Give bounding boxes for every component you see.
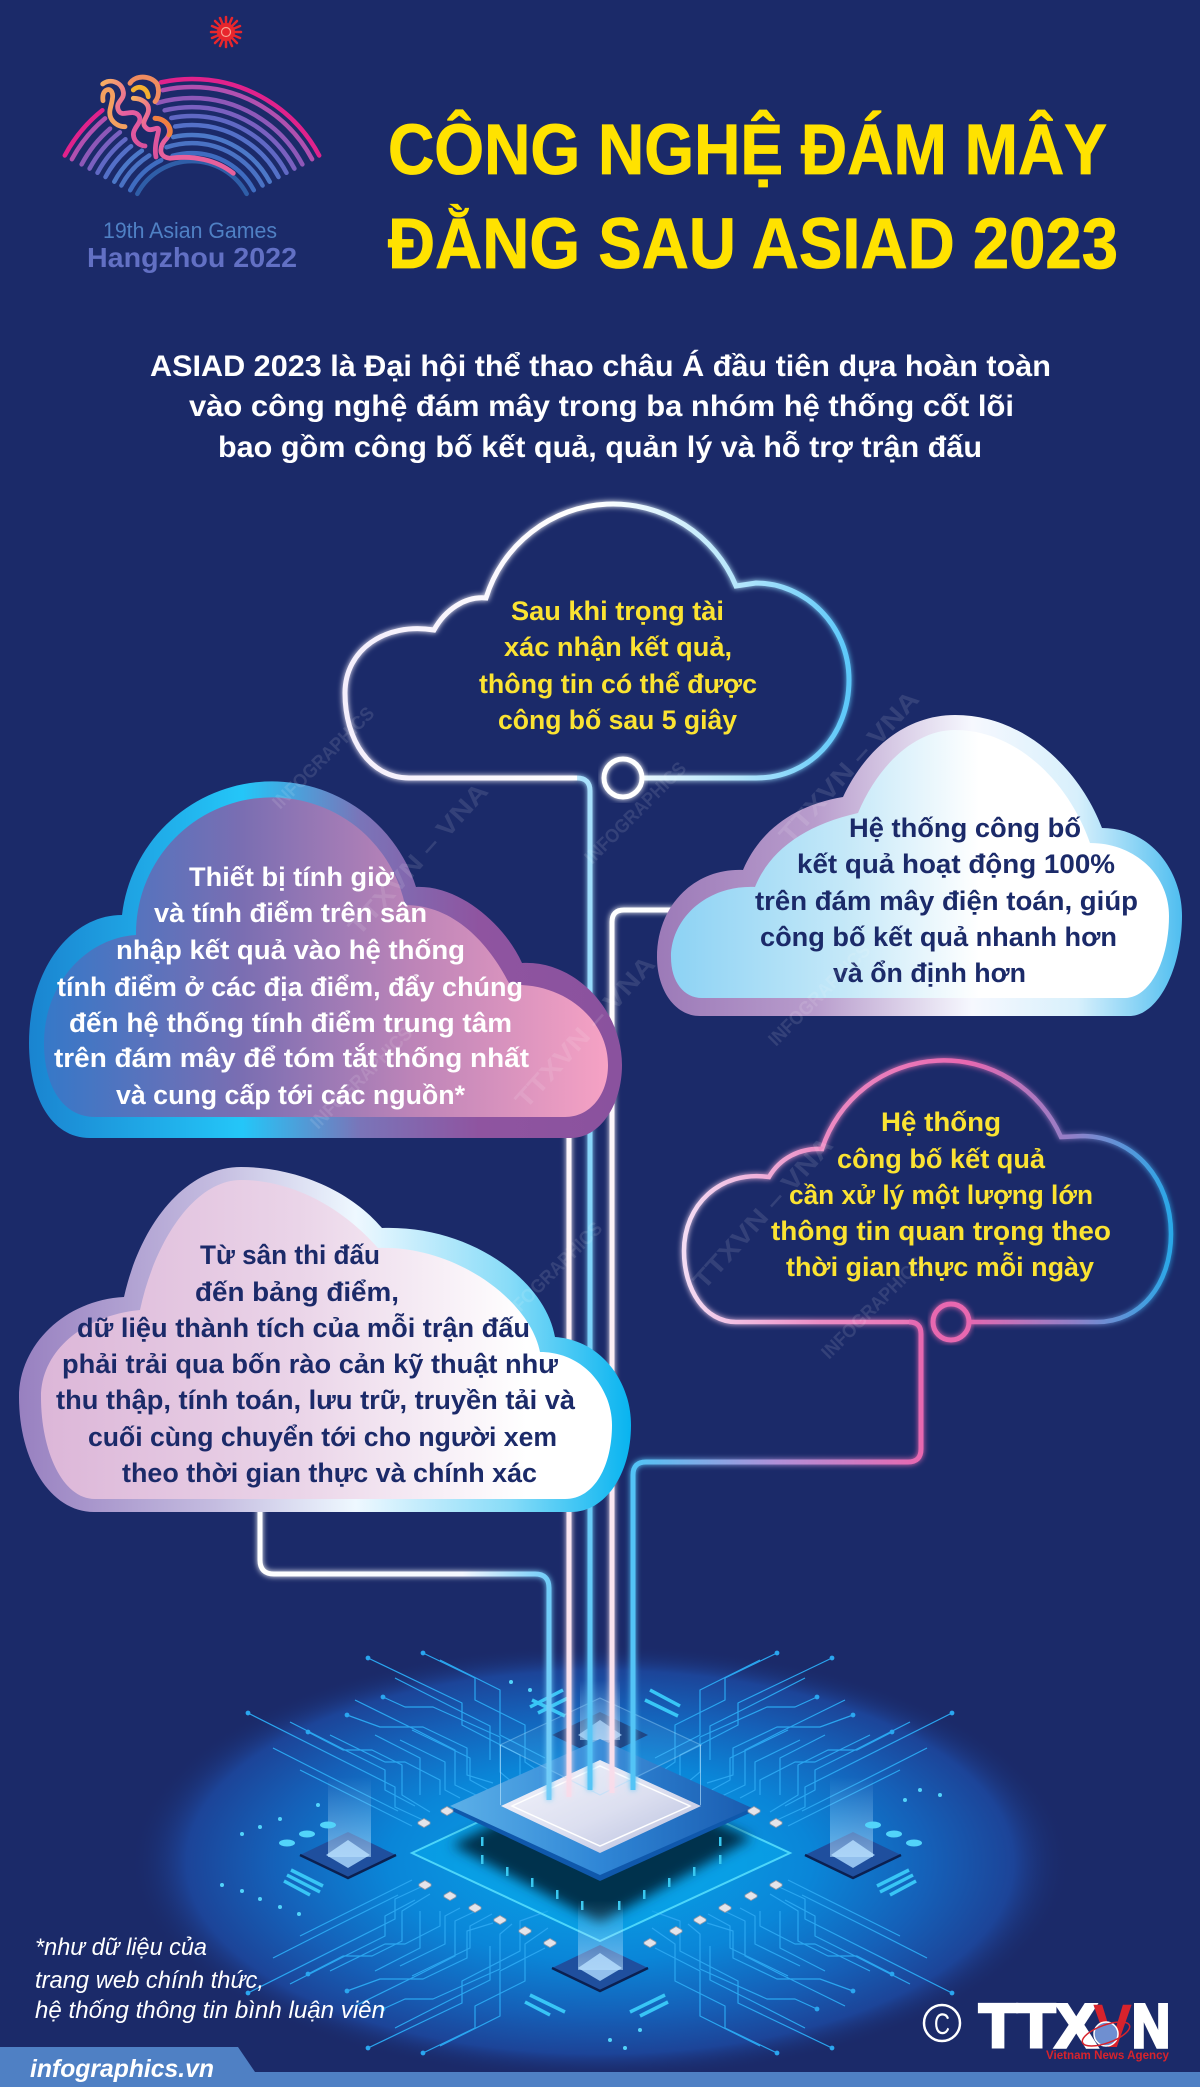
shadow pins bbox=[481, 1837, 722, 1910]
cloud text: phải trải qua bốn rào cản kỹ thuật như bbox=[62, 1349, 558, 1379]
watermarks bbox=[269, 685, 928, 1364]
cloud fill bbox=[671, 730, 1169, 998]
panel: light right cloud bbox=[657, 715, 1182, 1016]
cloud text bbox=[56, 1240, 576, 1488]
watermarks: INFOGRAPHICS bbox=[269, 703, 379, 814]
cloud text: đến bảng điểm, bbox=[195, 1277, 399, 1307]
cloud border bbox=[657, 715, 1182, 1016]
watermarks: TTXVN – VNA bbox=[510, 950, 661, 1114]
logo arcs bbox=[65, 79, 319, 194]
source url: infographics.vn bbox=[30, 2055, 214, 2083]
footnote: hệ thống thông tin bình luận viên bbox=[35, 1997, 385, 2024]
footnote: trang web chính thức, bbox=[35, 1967, 264, 1994]
small chip: left bbox=[300, 1777, 396, 1878]
watermarks: TTXVN – VNA bbox=[688, 1131, 839, 1295]
chip shadow bbox=[452, 1770, 752, 1923]
connector node bbox=[933, 1304, 969, 1340]
cloud text: Sau khi trọng tài bbox=[511, 596, 724, 626]
cloud border bbox=[29, 781, 622, 1138]
cloud text: kết quả hoạt động 100% bbox=[797, 849, 1115, 879]
footnote bbox=[35, 1934, 385, 2024]
cloud text: và tính điểm trên sân bbox=[154, 898, 427, 928]
logo caption bbox=[87, 218, 297, 273]
logo caption: Hangzhou 2022 bbox=[87, 242, 297, 273]
watermarks: INFOGRAPHICS bbox=[818, 1253, 928, 1364]
cloud text: trên đám mây để tóm tắt thống nhất bbox=[54, 1042, 529, 1073]
watermarks: TTXVN – VNA bbox=[343, 777, 494, 941]
logo: Hangzhou 2022 bbox=[65, 17, 319, 273]
panel: lilac cloud bbox=[19, 1167, 631, 1512]
circuit traces bbox=[246, 1651, 954, 2055]
small chip: top bbox=[552, 1680, 648, 1758]
cloud text: và ổn định hơn bbox=[833, 958, 1026, 988]
line from top cloud bbox=[577, 778, 590, 1790]
cloud outline bbox=[684, 1060, 1171, 1322]
agency name: Vietnam News Agency bbox=[1046, 2048, 1169, 2062]
footnote: *như dữ liệu của bbox=[35, 1934, 207, 1961]
cloud text: Hệ thống công bố bbox=[849, 813, 1081, 843]
cloud text: công bố kết quả bbox=[837, 1144, 1046, 1174]
footer bar bbox=[0, 2047, 1200, 2087]
cloud text: và cung cấp tới các nguồn* bbox=[116, 1080, 465, 1110]
cloud text: Thiết bị tính giờ bbox=[189, 862, 395, 892]
main chip top face bbox=[500, 1698, 701, 1853]
cloud text: đến hệ thống tính điểm trung tâm bbox=[69, 1008, 512, 1038]
cloud text: cuối cùng chuyển tới cho người xem bbox=[88, 1422, 557, 1452]
solder pads bbox=[418, 1806, 782, 1948]
small chip: right bbox=[805, 1777, 901, 1878]
intro text: bao gồm công bố kết quả, quản lý và hỗ trợ trận đấu bbox=[218, 430, 982, 464]
cloud text: cần xử lý một lượng lớn bbox=[789, 1180, 1093, 1210]
cloud text bbox=[771, 1107, 1111, 1282]
cloud text bbox=[479, 596, 757, 735]
icon: copyright: C bbox=[934, 2008, 950, 2041]
icon: sun emblem bbox=[211, 17, 241, 47]
cloud text: Hệ thống bbox=[881, 1107, 1001, 1137]
cloud border bbox=[19, 1167, 631, 1512]
line from lilac cloud bbox=[260, 1505, 549, 1800]
logo: TTXVN: TTX bbox=[979, 1992, 1097, 2060]
line from pink cloud bbox=[633, 1322, 921, 1790]
cloud text: theo thời gian thực và chính xác bbox=[122, 1458, 537, 1488]
cloud text: công bố kết quả nhanh hơn bbox=[760, 922, 1117, 952]
glowing dots and bars bbox=[220, 1680, 942, 2050]
logo: TTXVN: N bbox=[1132, 1992, 1170, 2060]
logo dragon squiggle bbox=[103, 77, 233, 173]
title: ĐẰNG SAU ASIAD 2023 bbox=[388, 205, 1118, 284]
cloud text: thông tin có thể được bbox=[479, 669, 757, 699]
vertical connector lines bbox=[260, 778, 921, 1800]
cloud text bbox=[54, 862, 529, 1110]
logo: TTXVN bbox=[979, 1992, 1170, 2062]
cloud text: tính điểm ở các địa điểm, đẩy chúng bbox=[57, 972, 523, 1002]
intro text: ASIAD 2023 là Đại hội thể thao châu Á đầu tiên dựa hoàn toàn bbox=[150, 349, 1051, 383]
cloud text: thông tin quan trọng theo bbox=[771, 1216, 1111, 1246]
watermarks: INFOGRAPHICS bbox=[307, 1023, 417, 1134]
icon: copyright bbox=[924, 2005, 960, 2041]
logo caption: 19th Asian Games bbox=[103, 218, 277, 243]
small chip: bottom bbox=[552, 1900, 648, 1991]
cloud text: trên đám mây điện toán, giúp bbox=[755, 886, 1138, 916]
watermarks: INFOGRAPHICS bbox=[497, 1218, 607, 1329]
cloud text bbox=[755, 813, 1138, 988]
watermarks: INFOGRAPHICS bbox=[765, 940, 875, 1051]
cloud text: nhập kết quả vào hệ thống bbox=[116, 935, 465, 965]
main chip substrate bbox=[450, 1739, 752, 1881]
connector node bbox=[604, 759, 642, 797]
panel: blue-pink cloud bbox=[29, 781, 622, 1138]
title bbox=[388, 110, 1118, 284]
cloud text: xác nhận kết quả, bbox=[504, 632, 732, 662]
logo: TTXVN: V bbox=[1093, 1992, 1132, 2060]
chip and circuit illustration bbox=[130, 1644, 1070, 2080]
line from light cloud bbox=[612, 910, 680, 1793]
cloud text: dữ liệu thành tích của mỗi trận đấu bbox=[77, 1312, 530, 1343]
intro text: vào công nghệ đám mây trong ba nhóm hệ thống cốt lõi bbox=[189, 390, 1014, 423]
panel: pink outline cloud bbox=[684, 1060, 1171, 1340]
cloud outline bbox=[345, 504, 849, 778]
intro text bbox=[150, 349, 1051, 464]
diamond outline on board bbox=[412, 1765, 790, 1941]
cloud fill bbox=[44, 797, 608, 1117]
panel: top outline cloud bbox=[345, 504, 849, 797]
watermarks: TTXVN – VNA bbox=[774, 685, 925, 849]
board glow bbox=[130, 1644, 1070, 2080]
cloud text: công bố sau 5 giây bbox=[498, 705, 737, 735]
cloud fill bbox=[41, 1180, 612, 1499]
globe bbox=[1094, 2022, 1118, 2046]
watermarks: INFOGRAPHICS bbox=[581, 758, 691, 869]
line from blue-pink cloud bbox=[566, 1130, 572, 1797]
cloud text: thu thập, tính toán, lưu trữ, truyền tải và bbox=[56, 1385, 576, 1415]
cloud text: thời gian thực mỗi ngày bbox=[786, 1251, 1094, 1282]
cloud text: Từ sân thi đấu bbox=[200, 1240, 380, 1270]
title: CÔNG NGHỆ ĐÁM MÂY bbox=[388, 110, 1107, 190]
